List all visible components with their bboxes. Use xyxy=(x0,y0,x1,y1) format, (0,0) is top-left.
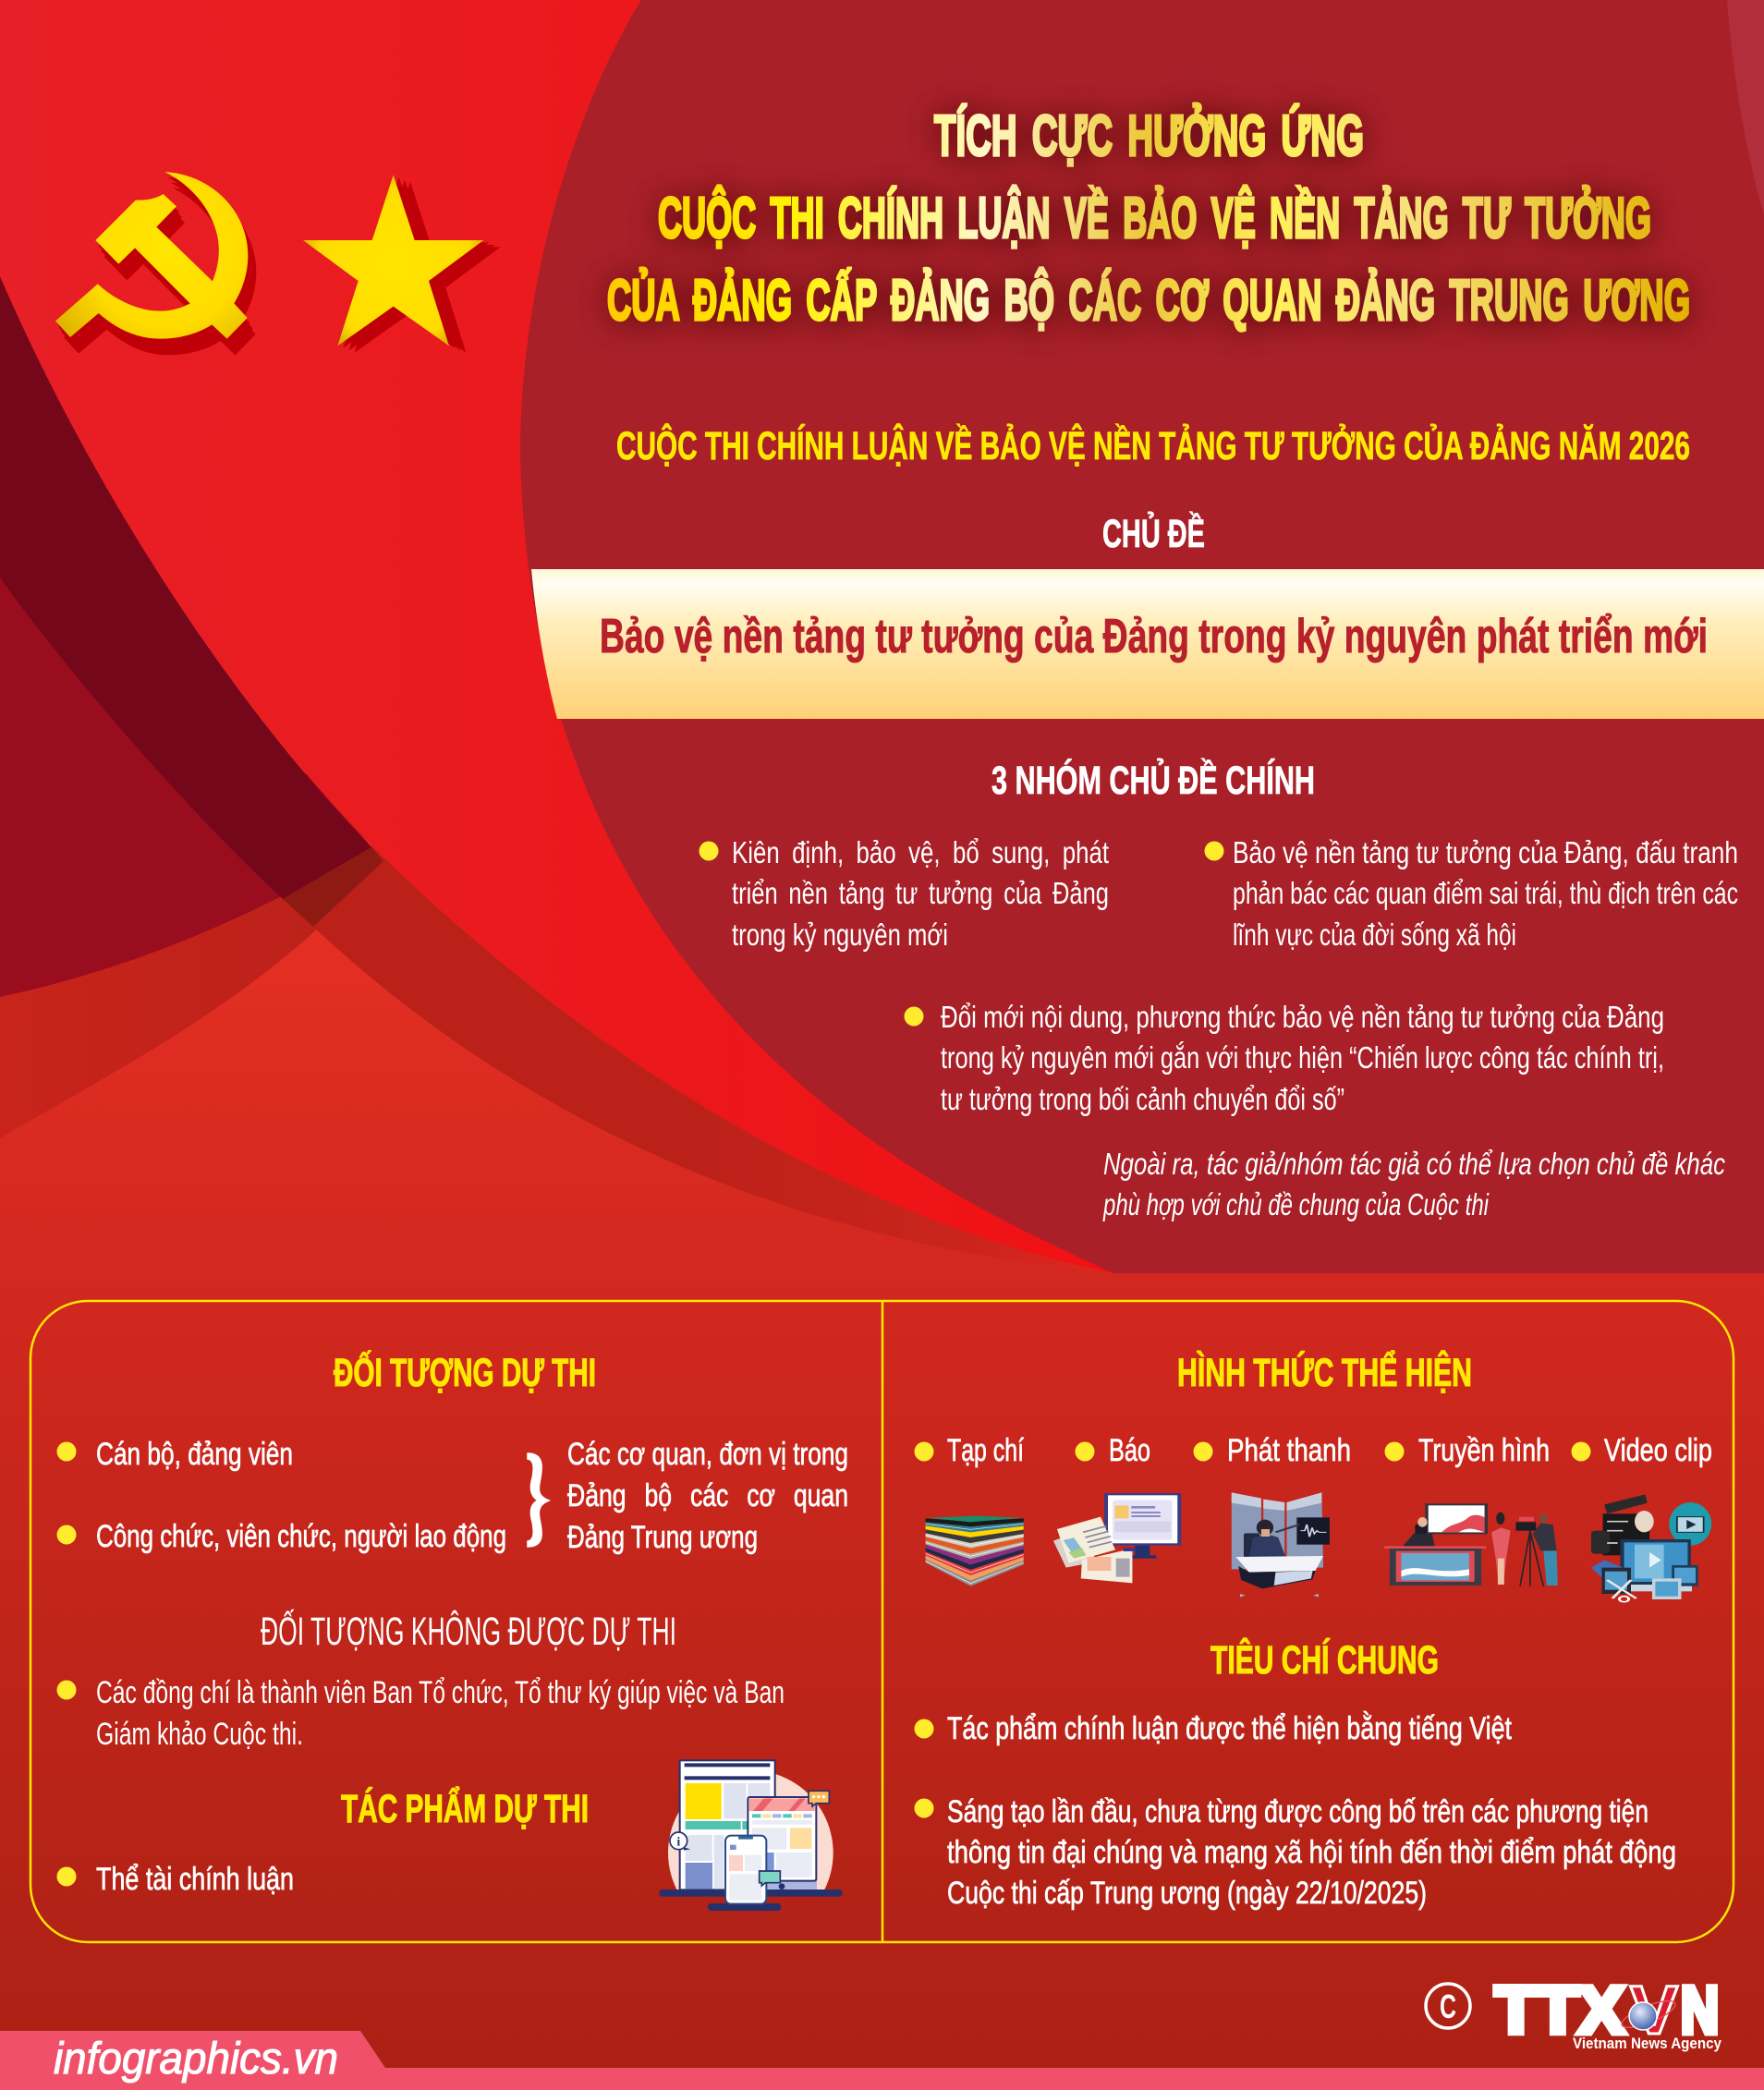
eligible organisations xyxy=(567,1437,848,1555)
footer site name: infographics.vn xyxy=(54,2035,338,2084)
topic 3 xyxy=(904,1000,1664,1116)
heading: đối tượng dự thi: ĐỐI TƯỢNG DỰ THI xyxy=(334,1350,596,1395)
logo: TTXVN: V xyxy=(1630,1972,1678,2048)
topic 1 xyxy=(699,835,1109,952)
eligible organisations: Đảng bộ các cơ quan xyxy=(567,1478,848,1513)
excluded list xyxy=(57,1675,785,1752)
topic 3: tư tưởng trong bối cảnh chuyển đổi số” xyxy=(941,1082,1344,1116)
logo: TTXVN xyxy=(1495,1972,1721,2052)
eligible organisations: Đảng Trung ương xyxy=(567,1520,758,1555)
format labels: Video clip xyxy=(1604,1433,1712,1468)
heading: tác phẩm dự thi: TÁC PHẨM DỰ THI xyxy=(341,1786,589,1831)
topic 2: lĩnh vực của đời sống xã hội xyxy=(1233,917,1516,952)
format labels: Phát thanh xyxy=(1227,1433,1351,1468)
heading: 3 nhóm chủ đề chính: 3 NHÓM CHỦ ĐỀ CHÍNH xyxy=(991,758,1315,803)
format labels: Truyền hình xyxy=(1418,1433,1550,1468)
topic 1: Kiên định, bảo vệ, bổ sung, phát xyxy=(732,835,1109,869)
icon: newspapers and monitor xyxy=(1053,1493,1181,1583)
logo: TTXVN: Vietnam News Agency xyxy=(1573,2035,1721,2052)
dark red circle panel xyxy=(520,0,1764,1273)
panel: details xyxy=(30,1301,1734,1942)
topic 2 xyxy=(1205,835,1738,952)
icon: video production xyxy=(1591,1494,1711,1602)
corner arc xyxy=(1727,0,1764,214)
eligible list: Cán bộ, đảng viên xyxy=(96,1437,293,1472)
heading: đối tượng không được dự thi: ĐỐI TƯỢNG KHÔNG ĐƯỢC DỰ THI xyxy=(261,1609,676,1654)
topic 1: triển nền tảng tư tưởng của Đảng xyxy=(732,876,1109,910)
copyright symbol xyxy=(1426,1984,1470,2028)
format labels xyxy=(915,1433,1712,1468)
criterion 2 xyxy=(915,1794,1676,1911)
logo: TTXVN: TTX xyxy=(1495,1975,1624,2047)
format labels: Báo xyxy=(1109,1433,1150,1468)
theme banner xyxy=(531,569,1764,719)
eligible list: Công chức, viên chức, người lao động xyxy=(96,1519,506,1554)
topic 1: trong kỷ nguyên mới xyxy=(732,917,948,952)
heading: chủ đề: CHỦ ĐỀ xyxy=(1102,511,1205,556)
icon: television studio xyxy=(1384,1504,1558,1586)
icon: devices: i xyxy=(676,1835,680,1849)
criterion 2: Cuộc thi cấp Trung ương (ngày 22/10/2025) xyxy=(947,1876,1427,1911)
title xyxy=(607,104,1690,333)
title: TÍCH CỰC HƯỞNG ỨNG xyxy=(934,104,1364,168)
excluded list: Các đồng chí là thành viên Ban Tổ chức, Tổ thư ký giúp việc và Ban xyxy=(96,1675,785,1710)
logo: TTXVN: N xyxy=(1681,1975,1719,2047)
copyright symbol: C xyxy=(1440,1987,1456,2025)
icon: hammer and sickle xyxy=(55,172,256,355)
brace xyxy=(528,1453,549,1547)
format labels: Tạp chí xyxy=(947,1433,1024,1468)
eligible organisations: Các cơ quan, đơn vị trong xyxy=(567,1437,848,1472)
note: phù hợp với chủ đề chung của Cuộc thi xyxy=(1102,1187,1490,1221)
entry list xyxy=(57,1862,294,1897)
excluded list: Giám khảo Cuộc thi. xyxy=(96,1717,303,1752)
entry list: Thể tài chính luận xyxy=(96,1862,294,1897)
note xyxy=(1102,1147,1725,1221)
criterion 1: Tác phẩm chính luận được thể hiện bằng tiếng Việt xyxy=(947,1711,1512,1746)
footer band xyxy=(0,2031,1764,2090)
heading: tiêu chí chung: TIÊU CHÍ CHUNG xyxy=(1210,1637,1439,1683)
icon: star xyxy=(303,175,501,353)
icon: magazines xyxy=(926,1516,1024,1586)
icon: radio studio xyxy=(1232,1492,1330,1598)
icon: devices xyxy=(659,1760,843,1911)
eligible list xyxy=(57,1437,506,1554)
heading: hình thức thể hiện: HÌNH THỨC THỂ HIỆN xyxy=(1177,1350,1472,1395)
